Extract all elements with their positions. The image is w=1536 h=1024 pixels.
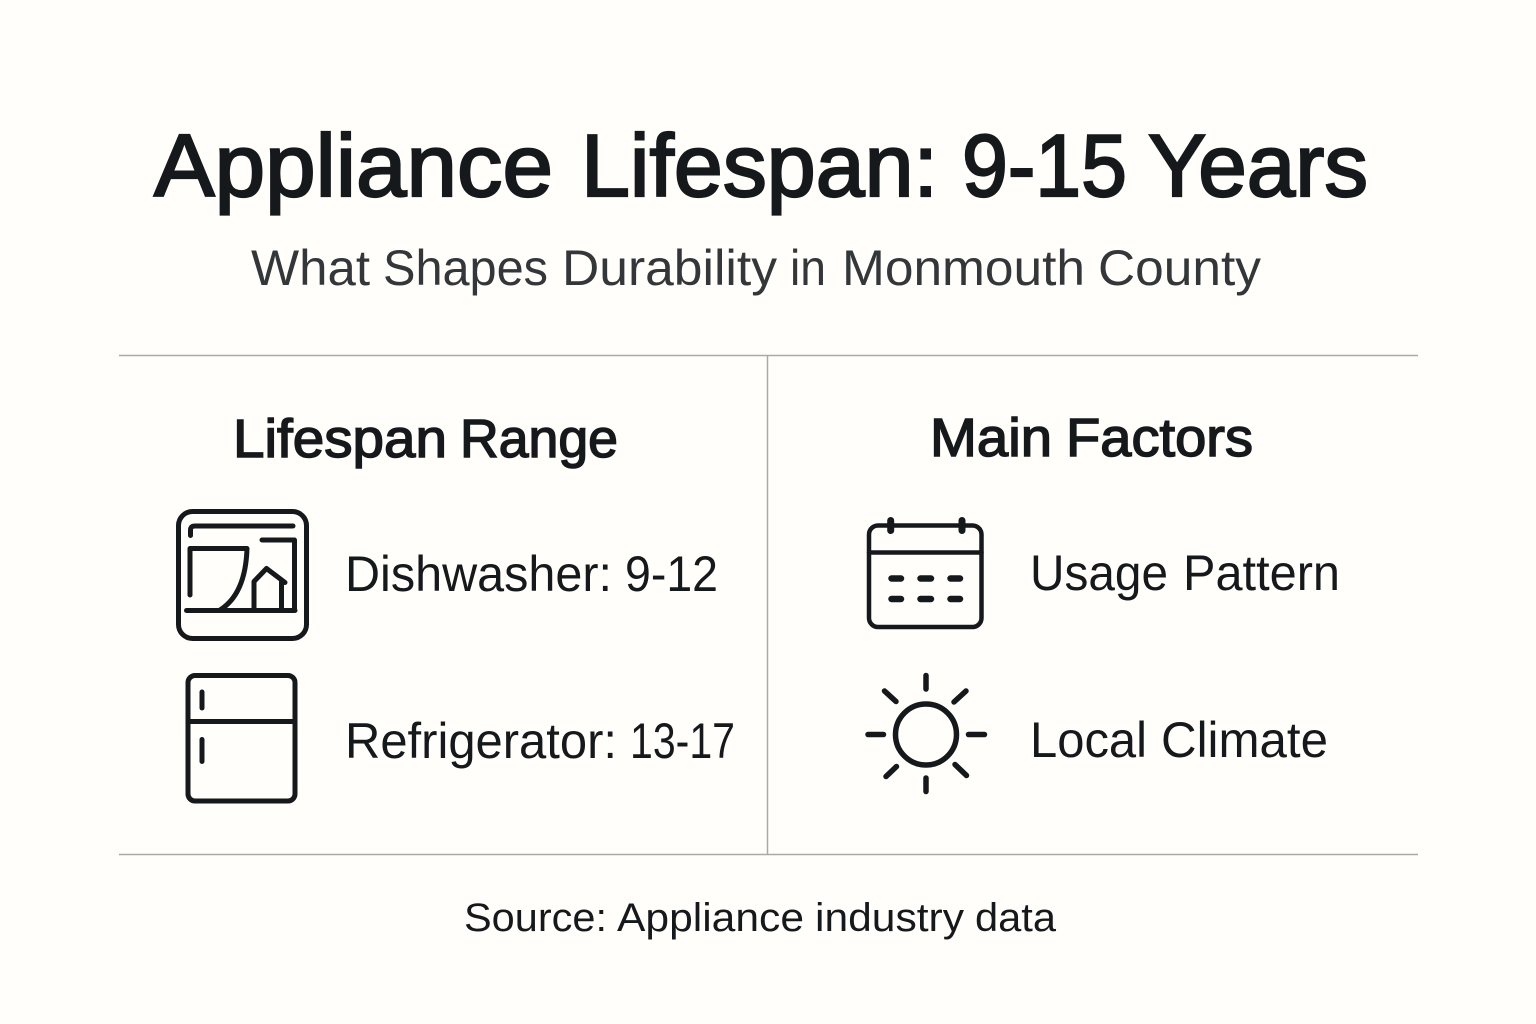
source note: industry: [815, 896, 964, 940]
heading: lifespan range: Lifespan: [233, 409, 447, 469]
label: local climate: [1030, 712, 1328, 768]
title: Appliance: [154, 116, 553, 215]
icon: dishwasher: [178, 512, 306, 638]
heading: lifespan range: [233, 409, 618, 469]
heading: main factors: [930, 408, 1253, 468]
heading: main factors: Factors: [1066, 408, 1253, 468]
subtitle: Shapes: [383, 240, 548, 296]
subtitle: [251, 240, 1261, 296]
label: usage pattern: Pattern: [1183, 545, 1340, 601]
subtitle: What: [251, 240, 370, 296]
icon: refrigerator: [188, 676, 295, 801]
label: usage pattern: [1030, 545, 1340, 601]
title: Lifespan:: [581, 116, 938, 215]
title: [154, 116, 1368, 215]
icon: sun: [868, 676, 984, 792]
subtitle: Durability: [562, 240, 777, 296]
label: refrigerator: 13-17: [630, 713, 735, 769]
title: Years: [1148, 116, 1368, 215]
label: local climate: Climate: [1161, 712, 1328, 768]
label: refrigerator: Refrigerator:: [345, 713, 617, 769]
panel: main factors: [868, 408, 1340, 792]
subtitle: Monmouth: [842, 240, 1085, 296]
icon: calendar: [869, 520, 982, 627]
label: usage pattern: Usage: [1030, 545, 1168, 601]
source note: [464, 896, 1057, 940]
heading: lifespan range: Range: [460, 409, 618, 469]
label: dishwasher: 9-12: [625, 546, 718, 602]
source note: Appliance: [617, 896, 804, 940]
heading: main factors: Main: [930, 408, 1052, 468]
label: dishwasher: Dishwasher:: [345, 546, 612, 602]
title: 9-15: [962, 116, 1127, 215]
source note: data: [975, 896, 1057, 940]
subtitle: in: [790, 240, 826, 296]
source note: Source:: [464, 896, 607, 940]
panel: lifespan range: [178, 409, 735, 801]
subtitle: County: [1098, 240, 1261, 296]
label: local climate: Local: [1030, 712, 1147, 768]
